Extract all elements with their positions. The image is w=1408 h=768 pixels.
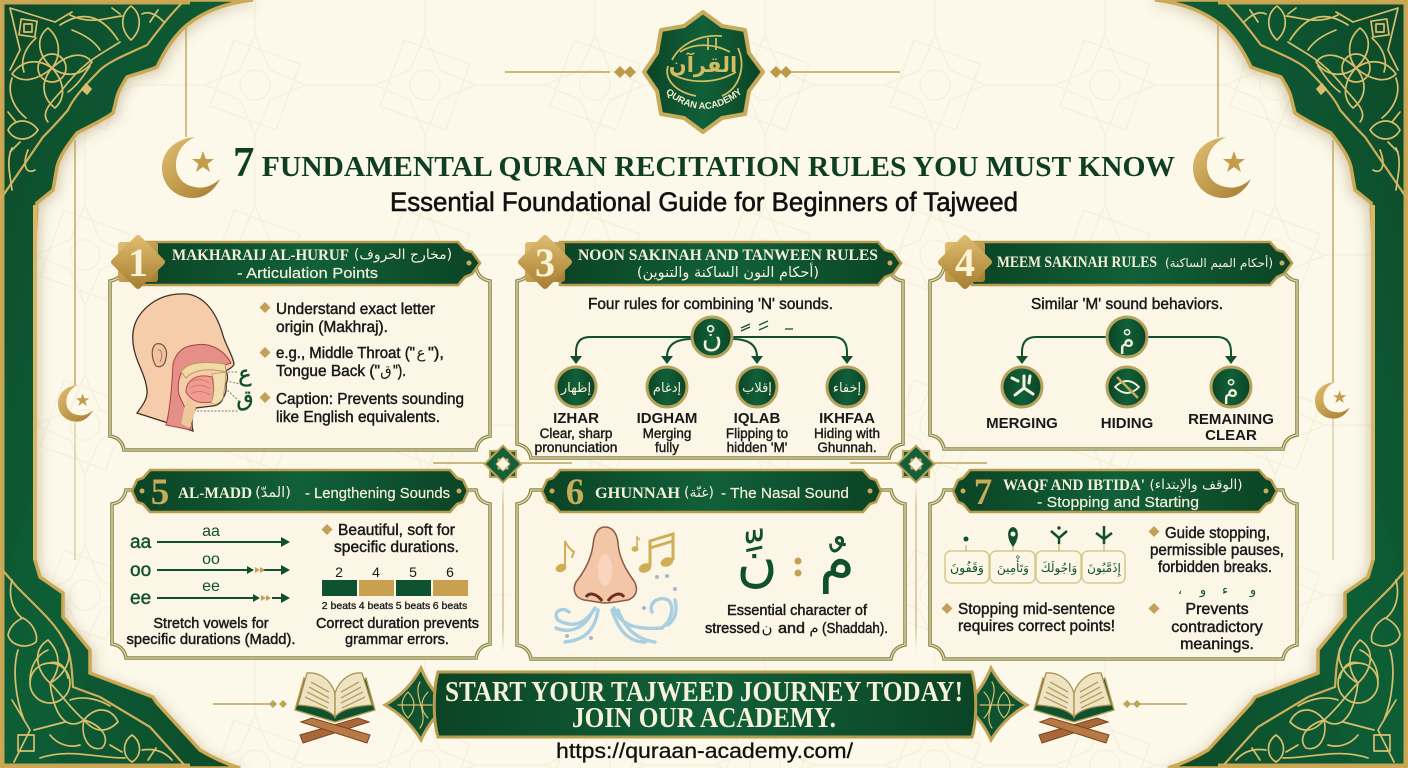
bullet: guide stopping: ء — [1222, 583, 1228, 598]
vowel stretch arrows: oo — [202, 551, 220, 568]
panel 5 header: (المدّ) — [255, 485, 291, 501]
meem rule labels: CLEAR — [1205, 427, 1257, 444]
panel 3: Noon Sakinah and Tanween rules: Four rules for combining 'N' sounds. — [588, 296, 833, 313]
call to action banner: START YOUR TAJWEED JOURNEY TODAY! — [445, 677, 963, 708]
panel 6 header: - The Nasal Sound — [721, 485, 849, 502]
icon: head cross-section — [133, 294, 254, 431]
ghunnah caption: stressed — [705, 621, 760, 637]
duration bars: 5 beats — [396, 600, 430, 612]
duration bars: 6 beats — [433, 600, 467, 612]
number badge 3: 3 — [535, 240, 555, 285]
duration bars: Correct duration prevents — [316, 616, 479, 632]
icon: small crescent right — [1315, 382, 1350, 419]
tree diagram of noon rules — [556, 317, 867, 407]
tree diagram of meem rules — [1002, 317, 1251, 407]
panel 7 header: WAQF AND IBTIDA' — [1003, 477, 1145, 494]
icon: open Quran on stand left — [295, 673, 375, 743]
number badge 4 — [937, 234, 993, 290]
bullet: guide stopping: و — [1249, 583, 1256, 598]
bullet: guide stopping — [1148, 525, 1284, 598]
icon: nose with music notes and air — [555, 527, 677, 642]
number badge 1: 1 — [128, 240, 148, 285]
decorative medallions — [433, 463, 987, 652]
rule labels: Clear, sharp — [540, 426, 612, 441]
bullet list: Understand exact letter — [276, 301, 436, 318]
number badge 1 — [110, 234, 166, 290]
tree diagram of noon rules: إخفاء — [833, 381, 861, 396]
rule labels: IKHFAA — [819, 410, 875, 427]
bullet: guide stopping: forbidden breaks. — [1158, 559, 1272, 576]
bullet: stopping mid-sentence: requires correct points! — [958, 618, 1115, 635]
bullet: guide stopping: و — [1199, 583, 1206, 598]
duration bars: 4 — [372, 564, 380, 580]
panel 1 header: - Articulation Points — [237, 265, 378, 282]
bullet list: Caption: Prevents sounding — [276, 391, 464, 408]
number badge 3 — [517, 234, 573, 290]
vowel stretch arrows: ee — [202, 578, 220, 595]
panel 4 header: MEEM SAKINAH RULES — [997, 254, 1157, 271]
rule labels: Hiding with — [814, 426, 880, 441]
logo: Quran Academy emblem: QURAN ACADEMY — [666, 88, 740, 110]
bullet list: ع — [417, 344, 426, 362]
panel 4 header — [972, 242, 1292, 285]
medallion left — [485, 446, 521, 482]
bullet: prevents contradictory meanings — [1148, 601, 1263, 653]
logo: Quran Academy emblem: القرآن — [669, 52, 737, 77]
panel 6 header: 6 — [566, 472, 584, 513]
number badge 4: 4 — [955, 240, 975, 285]
panel 5 header: AL-MADD — [178, 485, 252, 502]
rule labels — [534, 410, 880, 455]
panel 6 header: GHUNNAH — [595, 485, 680, 502]
bullet: guide stopping: ، — [1178, 583, 1182, 598]
title: 7 FUNDAMENTAL QURAN RECITATION RULES YOU MUST KNOW — [233, 140, 1175, 186]
bullet list: origin (Makhraj). — [276, 319, 388, 336]
left ornamental frame with corners — [0, 0, 253, 768]
large Arabic letters: نِّ — [736, 528, 778, 594]
right ornamental frame with corners — [1155, 0, 1408, 768]
panel 4 header: (أحكام الميم الساكنة) — [1165, 255, 1273, 270]
website URL: https://quraan-academy.com/ — [556, 740, 853, 763]
meem rule labels — [986, 411, 1274, 444]
panel 3 header — [560, 242, 901, 285]
hanging gold lines — [75, 25, 1333, 708]
ghunnah caption: ن — [761, 619, 773, 637]
left caption: Stretch vowels for — [153, 616, 269, 632]
rule labels: IZHAR — [553, 410, 599, 427]
panel 1 header: MAKHARAIJ AL-HURUF — [172, 247, 349, 264]
panel 4: Meem Sakinah rules — [930, 234, 1297, 449]
bullet list — [260, 301, 464, 426]
large Arabic letters: مٌ — [819, 526, 855, 594]
icon: crescent and star left — [162, 137, 220, 198]
tree diagram of noon rules: إقلاب — [742, 381, 772, 396]
stopping marks on words — [945, 526, 1125, 583]
rule labels: Merging — [643, 426, 691, 441]
subtitle: Essential Foundational Guide for Beginners of Tajweed — [390, 187, 1018, 217]
bullet list: e.g., Middle Throat (" — [276, 345, 415, 362]
panel 5 header — [132, 470, 468, 513]
rule labels: Flipping to — [726, 426, 788, 441]
bullet: prevents contradictory meanings: contradictory — [1171, 619, 1263, 636]
ghunnah caption: Essential character of — [727, 603, 868, 619]
vowel stretch arrows: aa — [130, 532, 152, 553]
call to action banner: JOIN OUR ACADEMY. — [572, 703, 836, 734]
panel 5: Al-Madd — [112, 470, 490, 658]
panel 7 header — [953, 470, 1277, 513]
panel 1: Makharaij al-Huruf — [110, 234, 490, 450]
left caption: specific durations (Madd). — [126, 632, 296, 648]
panel 4: Meem Sakinah rules: Similar 'M' sound behaviors. — [1031, 296, 1223, 313]
logo: Quran Academy emblem — [505, 10, 900, 134]
left caption — [126, 616, 296, 648]
rule labels: pronunciation — [534, 440, 618, 455]
panel 3: Noon Sakinah and Tanween rules — [517, 234, 903, 458]
vowel stretch arrows: ee — [130, 588, 151, 609]
panel 5 header: 5 — [151, 472, 169, 513]
rule labels: IQLAB — [734, 410, 780, 427]
duration bars: grammar errors. — [345, 632, 449, 648]
ghunnah caption: م — [809, 619, 819, 637]
meem rule labels: MERGING — [986, 415, 1058, 432]
ghunnah caption: and — [778, 621, 805, 637]
panel 5 header: - Lengthening Sounds — [305, 485, 450, 502]
stopping marks on words: وَاجُولَكَ — [1041, 560, 1077, 576]
vowel stretch arrows: aa — [202, 523, 220, 540]
tree diagram of noon rules: إظهار — [560, 381, 591, 396]
panel 6 header — [542, 470, 881, 513]
duration bars: 4 beats — [359, 600, 393, 612]
icon: crescent and star right — [1193, 137, 1251, 198]
icon: open Quran on stand right — [1034, 673, 1114, 743]
rule labels: Ghunnah. — [817, 440, 877, 455]
ghunnah caption: (Shaddah). — [822, 621, 888, 637]
duration bars: 2 beats — [322, 600, 356, 612]
bullet: stopping mid-sentence — [942, 601, 1115, 635]
call to action banner — [385, 668, 1027, 740]
bullet list: ق — [380, 362, 392, 380]
bullet: prevents contradictory meanings: meanings. — [1180, 636, 1254, 653]
icon: head cross-section: ق — [236, 387, 254, 412]
tree diagram of noon rules: إدغام — [653, 381, 681, 396]
medallion right — [898, 446, 934, 482]
panel 7 header: (الوقف والإبتداء) — [1149, 477, 1243, 493]
rule labels: hidden 'M' — [727, 440, 787, 455]
duration bars: 5 — [409, 564, 417, 580]
icon: small crescent left — [58, 385, 93, 422]
stopping marks on words: وَتَأْمِينَ — [997, 555, 1029, 576]
bullet list: Tongue Back (" — [276, 363, 380, 380]
bullet: stopping mid-sentence: Stopping mid-sentence — [958, 601, 1115, 618]
duration bars: 6 — [446, 564, 454, 580]
bullet list: "), — [428, 345, 444, 362]
panel 7: Waqf and Ibtida — [930, 470, 1297, 659]
tree diagram of meem rules: مْ — [1119, 325, 1135, 354]
duration bars — [316, 522, 479, 648]
large Arabic letters — [736, 526, 855, 594]
panel 6: Ghunnah — [517, 470, 905, 659]
bullet list: "). — [393, 363, 406, 380]
panel 7 header: - Stopping and Starting — [1037, 494, 1199, 511]
icon: head cross-section: ع — [238, 362, 252, 387]
ghunnah caption — [705, 603, 888, 637]
panel 1 header — [140, 242, 480, 285]
bullet: prevents contradictory meanings: Prevents — [1185, 601, 1249, 618]
rule labels: fully — [655, 440, 679, 455]
duration bars: Beautiful, soft for — [338, 522, 456, 539]
bullet list: like English equivalents. — [276, 409, 440, 426]
panel 3 header: (أحكام النون الساكنة والتنوين) — [637, 262, 819, 281]
panel 6 header: (غنّة) — [684, 485, 714, 501]
rule labels: IDGHAM — [637, 410, 697, 427]
stopping marks on words: إِذَمَّبُونَ — [1087, 561, 1121, 577]
meem rule labels: REMAINING — [1188, 411, 1274, 428]
stopping marks on words: وَقَفُونَ — [950, 560, 984, 576]
tree diagram of noon rules: نْ — [702, 321, 722, 354]
bullet: guide stopping: permissible pauses, — [1150, 542, 1284, 559]
duration bars: 2 — [335, 564, 343, 580]
panel 7 header: 7 — [974, 472, 992, 513]
panel 1 header: (مخارج الحروف) — [354, 247, 452, 263]
duration bars: specific durations. — [334, 539, 459, 556]
vowel stretch arrows — [130, 523, 290, 609]
vowel stretch arrows: oo — [130, 560, 151, 581]
tree diagram of meem rules: مْ — [1223, 375, 1239, 404]
bullet: guide stopping: Guide stopping, — [1165, 525, 1270, 542]
panel 3 header: NOON SAKINAH AND TANWEEN RULES — [578, 247, 878, 264]
meem rule labels: HIDING — [1101, 415, 1153, 432]
